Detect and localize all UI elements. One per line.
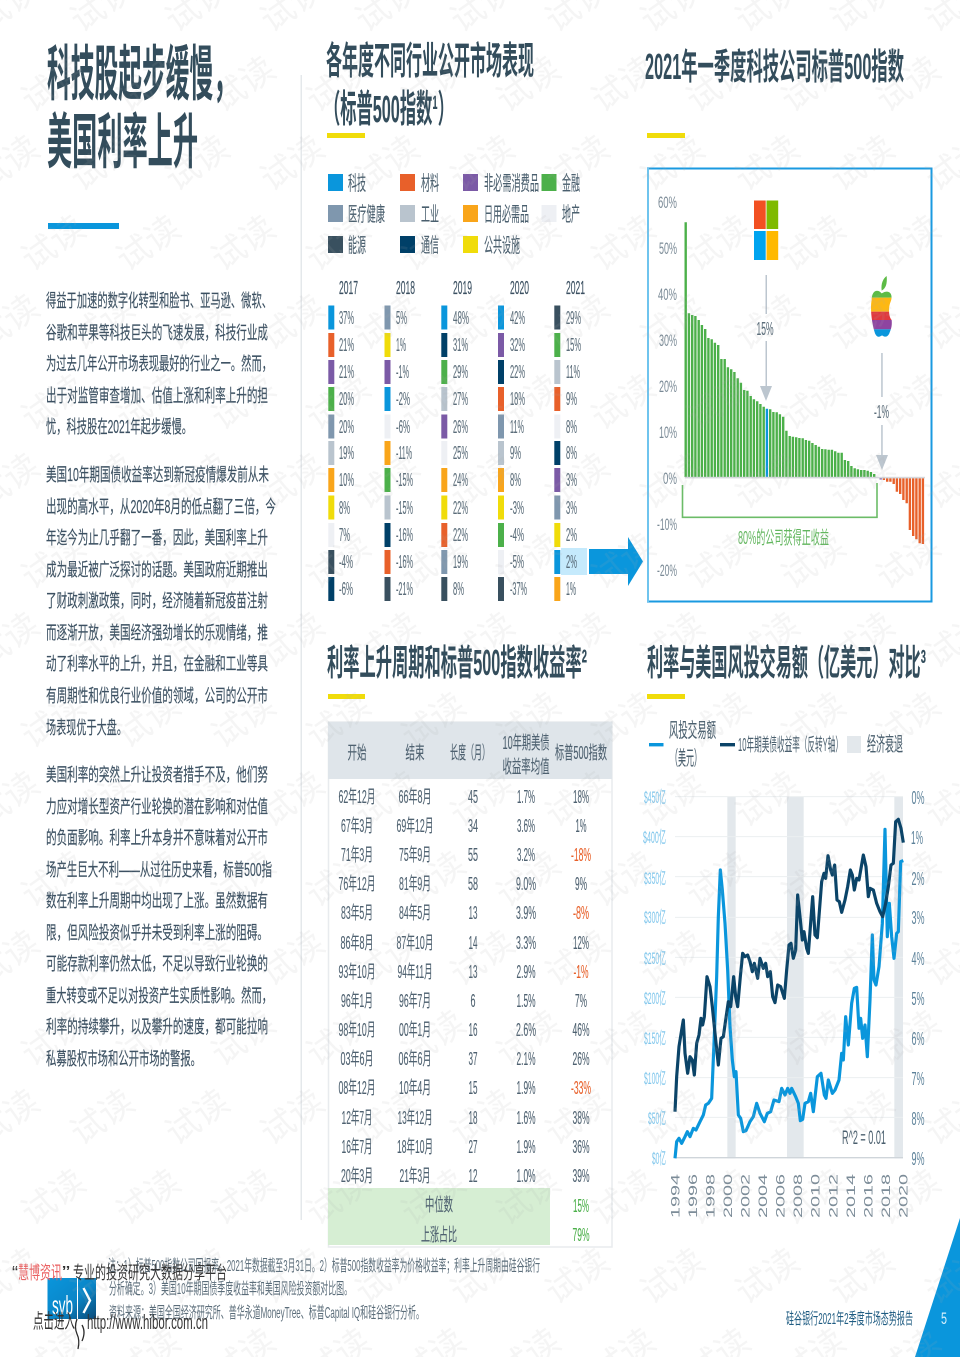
panel: body text: 成为最近被广泛探讨的话题。美国政府近期推出 (46, 560, 268, 580)
panel: body text: 忧，科技股在2021年起步缓慢。 (46, 417, 192, 437)
infographic page: 2020 (510, 278, 529, 298)
table rows: 66年8月 (398, 787, 432, 807)
column: 2019 (441, 278, 472, 601)
legend: sectors: 通信 (421, 234, 439, 257)
table header: 标普500指数 (555, 743, 607, 763)
y axis labels: -20% (657, 561, 677, 580)
panel: body text: 动了利率水平的上升，并且，在金融和工业等具 (46, 654, 268, 674)
column: 2017: 19% (339, 443, 354, 463)
promo overlay text: 专业的投资研究大数据分享平台 (73, 1263, 227, 1283)
promo overlay text: 慧博资讯 (18, 1263, 62, 1283)
table rows: 87年10月 (396, 933, 434, 953)
panel: body text: 有周期性和优良行业价值的领域，公司的公开市 (46, 686, 268, 706)
table rows: 20年3月 (341, 1166, 373, 1186)
panel: bar chart frame: -1% (874, 402, 889, 422)
table rows: 69年12月 (396, 816, 434, 836)
column: 2017: 21% (339, 362, 354, 382)
arrow: Apple -1% (874, 353, 889, 470)
table rows: 26% (572, 1049, 590, 1069)
table rows: 84年5月 (399, 903, 431, 923)
corner triangle and page number: 5 (941, 1309, 947, 1328)
column: 2019: 22% (453, 498, 468, 518)
column: 2021: 3% (566, 470, 577, 490)
infographic page: 金融 (562, 172, 580, 195)
x axis years: 2018 (879, 1173, 893, 1218)
bars: positive returns (686, 222, 874, 477)
table rows: 13 (468, 903, 478, 923)
table rows: 15 (468, 1078, 478, 1098)
column: 2019: 25% (453, 443, 468, 463)
infographic page: 地产 (562, 203, 580, 226)
table rows: 1.0% (516, 1166, 536, 1186)
x axis years: 2008 (791, 1173, 805, 1218)
infographic page: 8% (912, 1109, 924, 1129)
table rows: 96年7月 (399, 991, 431, 1011)
panel: body text: 了财政刺激政策，同时，经济随着新冠疫苗注射 (46, 591, 268, 611)
table rows: 10年4月 (399, 1078, 431, 1098)
table rows: 1.5% (516, 991, 536, 1011)
table rows: 2.6% (516, 1020, 536, 1040)
title (47, 41, 237, 229)
column: 2017: 7% (339, 525, 350, 545)
panel: body text: 场产生巨大不利——从过往历史来看，标普500指 (46, 860, 272, 880)
column: 2019: 27% (453, 389, 468, 409)
y axis labels: 0% (663, 469, 677, 488)
infographic page: -16% (396, 552, 413, 572)
table rows: 1% (576, 816, 586, 836)
legend: line chart: 风投交易额 (669, 719, 716, 742)
plot lines (675, 797, 903, 1158)
table rows: 93年10月 (338, 962, 376, 982)
table header: 长度（月） (450, 743, 490, 763)
column: 2020: -5% (510, 552, 524, 572)
y axis labels (657, 193, 677, 580)
x axis years: 2002 (738, 1173, 752, 1218)
column: 2019: 8% (453, 579, 464, 599)
column: 2017: 37% (339, 308, 354, 328)
chart: rates vs venture line chart: $50亿 (648, 1109, 666, 1128)
table summary rows: 上涨占比 (421, 1225, 457, 1245)
table rows: 2.9% (516, 962, 536, 982)
left axis labels (643, 788, 666, 1168)
chart: rates vs venture line chart: $300亿 (644, 908, 666, 927)
infographic page: 利率上升周期和标普500指数收益率² (327, 642, 587, 683)
bracket: 80% positive: 80%的公司获得正收益 (738, 528, 829, 548)
table summary rows: 中位数 (425, 1195, 453, 1215)
column: 2021: 8% (566, 443, 577, 463)
panel: body text: 力应对增长型资产行业轮换的潜在影响和对估值 (46, 797, 268, 817)
table rows: 18 (468, 1108, 478, 1128)
x axis years: 1994 (668, 1173, 682, 1218)
table rows: 3.9% (516, 903, 536, 923)
column: 2018: 1% (396, 335, 406, 355)
icon: SVB logo: svb (52, 1290, 73, 1320)
table rows (338, 787, 591, 1186)
table rows: 27 (468, 1137, 478, 1157)
table rows: 16年7月 (342, 1137, 372, 1157)
infographic page: -16% (396, 525, 413, 545)
infographic page: 2017 (339, 278, 358, 298)
table rows: 62年12月 (338, 787, 376, 807)
y axis labels: 30% (659, 331, 677, 350)
infographic page: -15% (396, 470, 413, 490)
panel: body text: 为过去几年公开市场表现最好的行业之一。然而， (46, 354, 272, 374)
table rows: 34 (468, 816, 478, 836)
column: 2017: 20% (339, 389, 354, 409)
column: 2020: -4% (510, 525, 524, 545)
table rows: 13 (468, 962, 478, 982)
infographic page: 6% (912, 1029, 924, 1049)
column: 2021: 11% (566, 362, 580, 382)
table: rate cycles and returns: 15% (573, 1196, 589, 1216)
legend: sectors: 非必需消费品 (484, 172, 539, 195)
footnotes: 分析确定。3）美国10年期国债季度收益率和美国风险投资额对比图。 (109, 1280, 352, 1298)
chart: rates vs venture line chart: $0亿 (652, 1149, 666, 1168)
panel: body text: 场表现优于大盘。 (46, 718, 127, 738)
bars: negative returns (884, 478, 923, 544)
table rows: 96年1月 (341, 991, 373, 1011)
footnotes (108, 1257, 540, 1322)
table: rate cycles and returns: 18% (573, 787, 589, 807)
y axis labels: 40% (658, 285, 677, 304)
infographic page: -15% (396, 498, 413, 518)
x axis years: 2016 (862, 1173, 876, 1218)
table rows: 9.0% (516, 874, 536, 894)
table rows: 1.9% (516, 1137, 536, 1157)
panel: body text: 美国利率的突然上升让投资者措手不及，他们努 (46, 765, 268, 785)
column: 2021: 2% (566, 525, 577, 545)
column: 2020: -3% (510, 498, 524, 518)
chart: rates vs venture line chart: $200亿 (644, 989, 666, 1008)
promo overlay text: 点击进入 (33, 1310, 75, 1333)
table rows: 1.7% (517, 787, 535, 807)
panel: body text: 得益于加速的数字化转型和脸书、亚马逊、微软、 (46, 291, 272, 311)
panel: body text: 限，但风险投资似乎并未受到利率上涨的阻碍。 (46, 923, 268, 943)
infographic page: 2% (912, 869, 924, 889)
bar: Microsoft (766, 409, 768, 477)
infographic page: 科技股起步缓慢， (47, 41, 237, 108)
column: 2021 (554, 278, 587, 601)
chart: rates vs venture line chart: R^2 = 0.01 (842, 1128, 886, 1149)
table rows: 08年12月 (338, 1078, 376, 1098)
legend: sectors: 工业 (421, 203, 439, 226)
panel: body text: 而逐渐开放，美国经济强劲增长的乐观情绪，推 (46, 623, 268, 643)
table rows: 45 (468, 787, 478, 807)
column: 2021: 29% (566, 308, 581, 328)
table rows: 18年10月 (397, 1137, 433, 1157)
column: 2021: 2% (566, 552, 577, 572)
table rows: 38% (572, 1108, 590, 1128)
column: 2020: 32% (510, 335, 525, 355)
legend: sectors (328, 172, 580, 257)
legend: line chart: （美元） (670, 747, 702, 770)
x axis years: 2004 (756, 1173, 770, 1218)
legend: sectors: 医疗健康 (348, 203, 385, 226)
column: 2019: 22% (453, 525, 468, 545)
icon: SVB logo (48, 1278, 96, 1349)
column: 2017: 10% (339, 470, 354, 490)
chart: rates vs venture line chart: $250亿 (644, 949, 666, 968)
table: rate cycles and returns: 12% (573, 933, 589, 953)
table rows: 81年9月 (399, 874, 431, 894)
column: 2019: 29% (453, 362, 468, 382)
table rows: 16 (468, 1020, 478, 1040)
table rows: 6 (470, 991, 476, 1011)
infographic page: 经济衰退 (867, 733, 903, 756)
y axis labels: 50% (659, 239, 677, 258)
panel: body text: 谷歌和苹果等科技巨头的飞速发展，科技行业成 (46, 323, 268, 343)
table rows: 3.3% (516, 933, 536, 953)
table rows: 12年7月 (342, 1108, 372, 1128)
panel: body text: 重大转变或不足以对投资产生实质性影响。然而， (46, 986, 272, 1006)
table rows: -1% (574, 962, 588, 982)
panel: body text: 数在利率上升周期中均出现了上涨。虽然数据有 (46, 891, 268, 911)
column: 2020: 22% (510, 362, 525, 382)
table rows: 83年5月 (341, 903, 373, 923)
panel: body text: 可能存款利率仍然太低，不足以导致行业轮换的 (46, 954, 268, 974)
panel: body text: 出于对监管审查增加、估值上涨和利率上升的担 (46, 386, 268, 406)
column: 2020: 18% (510, 389, 525, 409)
table rows: 94年11月 (398, 962, 432, 982)
column: 2021: 9% (566, 389, 577, 409)
table rows: 3.2% (517, 845, 535, 865)
panel: body text: 的负面影响。利率上升本身并不意味着对公开市 (46, 828, 268, 848)
panel: body text: 利率的持续攀升，以及攀升的速度，都可能拉响 (46, 1017, 268, 1037)
column: 2017: 8% (339, 498, 350, 518)
table rows: 71年3月 (341, 845, 373, 865)
bar: Apple (880, 478, 882, 480)
table: rate cycles and returns (328, 722, 612, 1247)
panel: body text: 私募股权市场和公开市场的警报。 (46, 1049, 201, 1069)
x axis years: 1998 (704, 1173, 718, 1218)
infographic page: -11% (396, 443, 412, 463)
y axis labels: 60% (658, 193, 677, 212)
column: 2020: 42% (510, 308, 525, 328)
table rows: 86年8月 (340, 933, 374, 953)
table summary rows (328, 1188, 590, 1245)
heading: rate cycles (327, 642, 587, 699)
table: rate cycles and returns: -18% (571, 845, 591, 865)
promo overlay text: ” (62, 1263, 70, 1283)
column: 2021: 15% (566, 335, 581, 355)
heading: sector performance (324, 41, 534, 138)
icon: Apple logo (871, 276, 892, 337)
table rows: 55 (468, 845, 478, 865)
column: 2021: 8% (566, 417, 577, 437)
footnotes: 资料来源：美国全国经济研究所、普华永道MoneyTree、标普Capital IQ和硅谷银行分析。 (109, 1304, 424, 1322)
legend: sectors: 公共设施 (484, 234, 520, 257)
table rows: 46% (572, 1020, 590, 1040)
column: 2017: -6% (339, 579, 353, 599)
table: rate cycles and returns: 79% (572, 1225, 590, 1245)
x axis years: 2000 (721, 1173, 735, 1218)
column: 2019: 48% (453, 308, 469, 328)
column: 2020: 8% (510, 470, 521, 490)
table rows: 1.6% (516, 1108, 536, 1128)
panel: bar chart frame: 15% (756, 319, 774, 339)
column: 2021: 1% (566, 579, 576, 599)
heading: sector performance: （标普500指数¹） (324, 89, 454, 131)
table rows: 12 (468, 1166, 478, 1186)
x axis years (668, 1173, 910, 1218)
column: 2021: 3% (566, 498, 577, 518)
table header (328, 722, 612, 779)
column: 2019: 31% (453, 335, 468, 355)
legend: sectors: 科技 (348, 172, 366, 195)
chart: rates vs venture line chart: $400亿 (643, 828, 666, 847)
column: 2020: 9% (510, 443, 521, 463)
column: 2017: 20% (339, 417, 354, 437)
table header: 开始 (348, 743, 366, 763)
bracket: 80% positive (682, 483, 877, 548)
infographic page: 2019 (453, 278, 472, 298)
table rows: 13年12月 (398, 1108, 432, 1128)
y axis labels: 20% (659, 377, 677, 396)
legend: sectors: 材料 (421, 172, 439, 195)
chart: rates vs venture line chart (643, 788, 924, 1218)
table rows: 98年10月 (338, 1020, 376, 1040)
y axis labels: 10% (659, 423, 677, 442)
title: 美国利率上升 (47, 109, 198, 176)
infographic page: 2018 (396, 278, 415, 298)
column: 2017 (328, 278, 358, 601)
promo overlay text: “ (12, 1263, 18, 1283)
infographic page: 0% (912, 788, 924, 808)
table rows: 76年12月 (338, 874, 376, 894)
legend: line chart (649, 719, 903, 770)
chart: rates vs venture line chart: $100亿 (644, 1069, 666, 1088)
column: 2019: 24% (453, 470, 468, 490)
column: 2020 (498, 278, 529, 601)
table rows: -8% (573, 903, 589, 923)
x axis years: 2006 (774, 1173, 788, 1218)
promo overlay text (12, 1263, 227, 1334)
table rows: 00年1月 (399, 1020, 431, 1040)
column: 2019: 19% (453, 552, 468, 572)
legend: sectors: 能源 (348, 234, 366, 257)
panel: body text: 出现的高水平，从2020年8月的低点翻了三倍，今 (46, 497, 276, 517)
table rows: 9% (575, 874, 587, 894)
legend: sectors: 日用必需品 (484, 203, 529, 226)
infographic page: 5% (912, 989, 924, 1009)
right axis labels: 1% (911, 828, 923, 848)
panel: bar chart frame (647, 168, 932, 602)
table: rate cycles and returns: -33% (571, 1078, 591, 1098)
column: 2017: -4% (339, 552, 353, 572)
table header: 10年期美债 (502, 733, 550, 753)
corner triangle and page number (915, 1218, 960, 1357)
infographic page: 各年度不同行业公开市场表现 (326, 41, 534, 83)
table rows: 67年3月 (341, 816, 373, 836)
infographic page: 3% (912, 908, 924, 928)
column: 2018: -6% (396, 417, 410, 437)
table rows: 03年6月 (340, 1049, 374, 1069)
x axis years: 2020 (896, 1173, 910, 1218)
table header: 结束 (406, 743, 424, 763)
table rows: 3.6% (517, 816, 535, 836)
arrow: to chart (589, 537, 643, 586)
infographic page: 4% (912, 949, 924, 969)
promo overlay text: http://www.hibor.com.cn (87, 1312, 208, 1334)
column: 2018: -2% (396, 389, 410, 409)
column: 2018 (384, 278, 415, 601)
table rows: 1.9% (516, 1078, 536, 1098)
table rows: 06年6月 (398, 1049, 432, 1069)
infographic page: -21% (396, 579, 413, 599)
y axis labels: -10% (657, 515, 677, 534)
column: 2017: 21% (339, 335, 354, 355)
chart: rates vs venture line chart: $350亿 (644, 869, 666, 888)
table rows: 14 (468, 933, 478, 953)
column: 2019: 26% (453, 417, 468, 437)
x axis years: 2012 (826, 1173, 840, 1218)
heading: rates vs venture (647, 642, 926, 699)
panel: body text (46, 291, 276, 1069)
infographic page: -37% (510, 579, 527, 599)
column: 2021: 2021 (566, 278, 585, 298)
column: 2018: -1% (396, 362, 409, 382)
right axis labels (911, 788, 924, 1169)
chart: rates vs venture line chart: $150亿 (644, 1029, 666, 1048)
table rows: 21年3月 (400, 1166, 430, 1186)
x axis years: 2014 (844, 1173, 858, 1218)
table rows: 39% (572, 1166, 590, 1186)
table rows: 58 (468, 874, 478, 894)
table rows: 75年9月 (399, 845, 431, 865)
panel: body text: 年迄今为止几乎翻了一番，因此，美国利率上升 (46, 528, 268, 548)
heading: Q1 2021 tech vs S&P (645, 46, 904, 138)
table rows: 36% (572, 1137, 590, 1157)
table rows: 37 (468, 1049, 478, 1069)
column: 2018: 5% (396, 308, 407, 328)
x axis years: 1996 (686, 1173, 700, 1218)
column: 2020: 11% (510, 417, 524, 437)
panel: body text: 美国10年期国债收益率达到新冠疫情爆发前从未 (46, 465, 269, 485)
table rows: 2.1% (516, 1049, 536, 1069)
table rows: 7% (575, 991, 587, 1011)
arrow: Microsoft 15% (756, 275, 774, 401)
x axis years: 2010 (808, 1173, 822, 1218)
icon: Microsoft logo (754, 200, 778, 260)
table header: 收益率均值 (502, 757, 550, 777)
infographic page: 7% (912, 1069, 924, 1089)
chart: rates vs venture line chart: $450亿 (644, 788, 666, 807)
infographic page: 9% (912, 1149, 924, 1169)
